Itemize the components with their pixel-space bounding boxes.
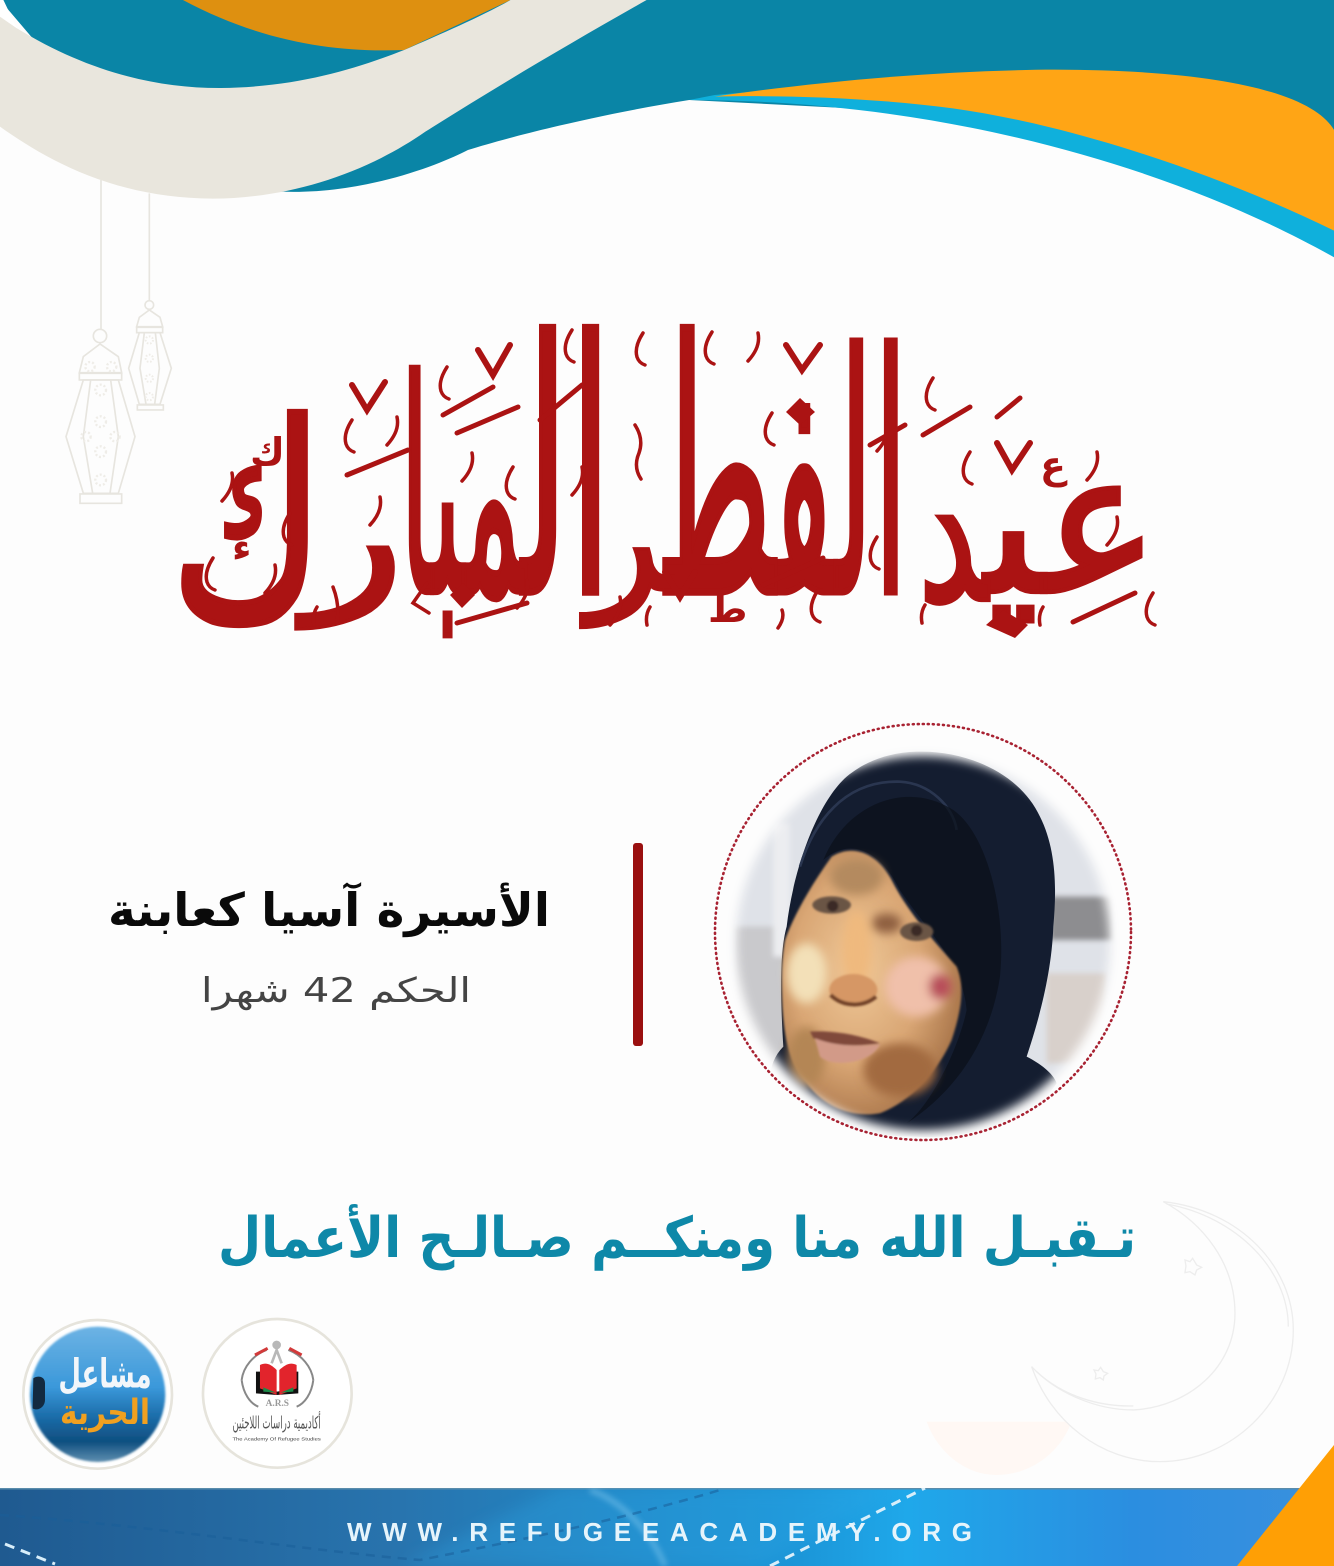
photo frame: dotted ring: [715, 724, 1131, 1140]
prisoner name: الأسيرة آسيا كعابنة: [108, 882, 550, 937]
calligraphy small letters: [232, 430, 1068, 631]
lips: [810, 1031, 880, 1063]
website address: WWW.REFUGEEACADEMY.ORG: [347, 1517, 972, 1547]
logo: Academy of Refugee Studies: أكاديمية دراسات اللاجئين: [232, 1411, 321, 1433]
title word: Eid, ya part: عي‍: [983, 405, 1160, 640]
face shading: [787, 858, 951, 1097]
calligraphy ornaments: [206, 330, 1155, 628]
academy english name: The Academy Of Refugee Studies: [232, 1436, 321, 1442]
footer orange corner: [1237, 1445, 1334, 1566]
title word: al-Mubarak, ra part: ر: [296, 443, 405, 629]
footer band: [0, 1488, 1334, 1566]
title: Eid al-Fitr calligraphy: [170, 271, 1160, 683]
divider bar: [633, 843, 643, 1046]
title word: al-Mubarak, kaf part: ك: [170, 368, 325, 683]
portrait photo: [715, 724, 1131, 1150]
hijab: [770, 752, 1057, 1137]
eyes: [812, 896, 933, 941]
logo: Freedom Torches: الحرية: [60, 1393, 150, 1433]
title word: al-Mubarak, mim-ba-alef part: ‍مبا: [400, 318, 526, 662]
book emblem: [242, 1341, 313, 1407]
title word: al-Fitr, alef-lam-fa part: الف‍: [772, 286, 908, 671]
logo: Academy of Refugee Studies: [203, 1319, 352, 1468]
calligraphy small letters: ط: [708, 587, 747, 631]
calligraphy dots: [450, 398, 1028, 638]
title word: Eid, dal part: ‍د: [918, 413, 989, 648]
blessing line: تـقبـل الله منا ومنكــم صـالـح الأعمال: [218, 1203, 1136, 1271]
title word: al-Mubarak, alef-lam part: ال‍: [520, 271, 612, 675]
calligraphy small letters: ع: [1040, 443, 1068, 487]
logo: Freedom Torches: مشاعل: [58, 1351, 152, 1397]
face: [782, 851, 961, 1114]
icon: hanging lanterns: [66, 180, 171, 503]
calligraphy small letters: ء: [232, 525, 251, 569]
title word: al-Fitr, ta part: ‍ط‍: [663, 271, 778, 675]
nose: [829, 974, 877, 1006]
title word: al-Fitr, ra part: ‍ر: [580, 449, 674, 628]
academy initials: A.R.S: [266, 1399, 289, 1409]
calligraphy small letters: ك: [250, 430, 285, 474]
logo: Freedom Torches: [23, 1320, 172, 1469]
sentence text: الحكم 42 شهرا: [201, 971, 471, 1011]
top wave banner: [0, 0, 1334, 257]
icon: crescent moon watermark: [927, 1202, 1293, 1475]
